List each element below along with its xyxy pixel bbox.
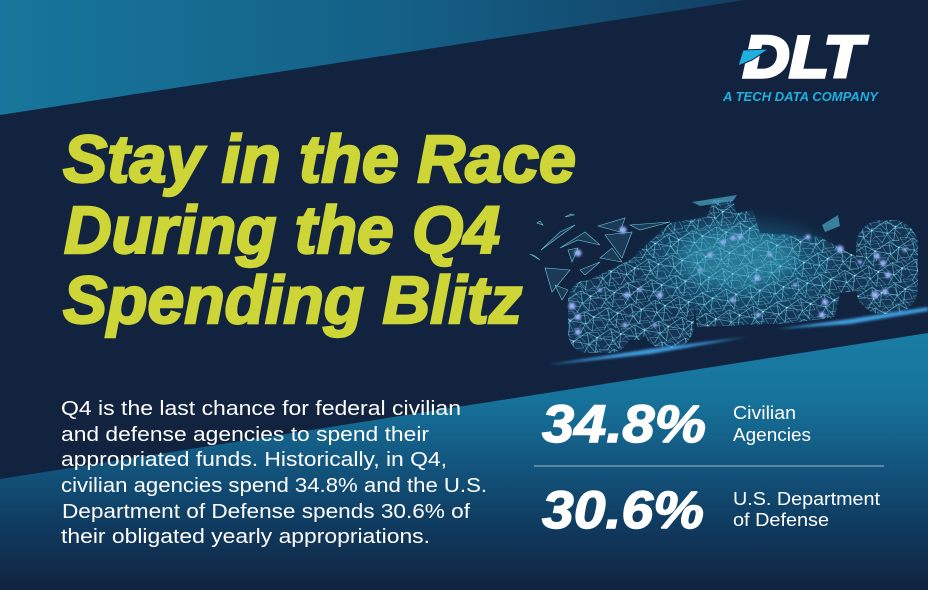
bottom diagonal band [0, 333, 928, 590]
title: Spending Blitz [63, 263, 522, 338]
title: Stay in the Race [63, 122, 576, 197]
illustration: wireframe race car [530, 190, 928, 365]
stat: civilian agencies: 34.8% [542, 395, 706, 454]
stat: department of defense [542, 481, 880, 540]
body paragraph: appropriated funds. Historically, in Q4, [61, 449, 447, 471]
stat: department of defense: U.S. Department [733, 489, 880, 509]
stat: department of defense: of Defense [733, 510, 829, 530]
rear wing [692, 195, 840, 232]
car body fill [568, 200, 918, 353]
logo wordmark: DLT [743, 25, 868, 90]
body paragraph: Q4 is the last chance for federal civilian [61, 398, 461, 420]
debris triangles [530, 214, 670, 300]
logo: DLT [722, 25, 880, 104]
title [63, 122, 576, 338]
stat: civilian agencies: Civilian [733, 403, 796, 423]
logo tagline: A TECH DATA COMPANY [722, 90, 880, 104]
body paragraph: and defense agencies to spend their [61, 424, 429, 446]
stat: civilian agencies: Agencies [733, 425, 811, 445]
stat: civilian agencies [542, 395, 811, 454]
body paragraph: Department of Defense spends 30.6% of [62, 501, 471, 523]
stat: department of defense: 30.6% [542, 481, 704, 540]
logo wedge [738, 49, 769, 66]
car glow [645, 220, 835, 310]
top diagonal band [0, 0, 745, 115]
body paragraph: their obligated yearly appropriations. [61, 526, 430, 548]
title: During the Q4 [64, 193, 500, 268]
body paragraph [61, 398, 487, 548]
glow nodes [568, 226, 907, 335]
body paragraph: civilian agencies spend 34.8% and the U.S. [61, 475, 487, 497]
road light streaks [547, 307, 928, 365]
